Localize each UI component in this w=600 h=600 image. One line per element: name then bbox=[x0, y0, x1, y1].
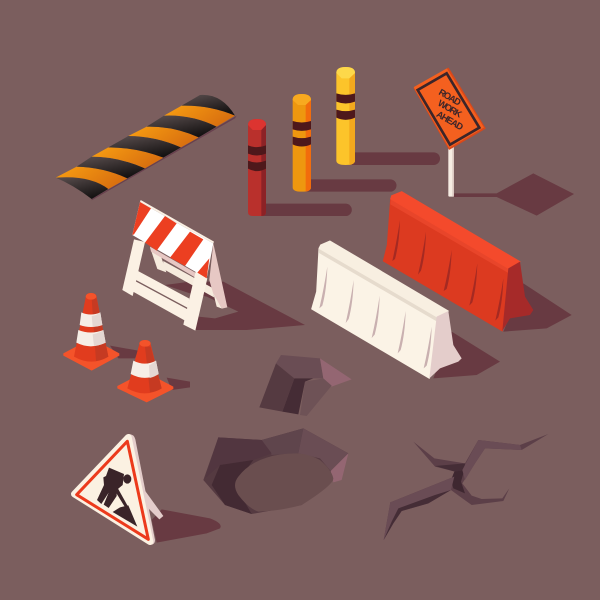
sawhorse barricade and cones bbox=[63, 200, 305, 402]
sign board: ROAD bbox=[437, 87, 463, 108]
speed bump bbox=[56, 95, 237, 200]
barricade shadow bbox=[165, 282, 305, 330]
bollard: yellow bbox=[336, 67, 355, 165]
shadows of bollards bbox=[262, 152, 440, 216]
large pothole bbox=[203, 428, 348, 514]
sign shadow bbox=[152, 509, 221, 543]
sign face bbox=[74, 437, 150, 542]
sign pole bbox=[448, 147, 454, 197]
barricade front legs bbox=[122, 239, 207, 331]
sign board: WORK bbox=[436, 98, 464, 120]
sign stand bbox=[143, 488, 163, 519]
sign board: AHEAD bbox=[435, 109, 465, 133]
small pothole bbox=[259, 355, 352, 416]
barrier shadows bbox=[503, 283, 572, 332]
sign thickness bbox=[128, 434, 155, 545]
red border bbox=[77, 441, 148, 539]
bollards and road sign bbox=[248, 67, 574, 216]
sign board bbox=[414, 68, 485, 149]
bollard: orange bbox=[293, 94, 311, 192]
sign shadow bbox=[453, 173, 574, 216]
barricade back legs and plank bbox=[150, 243, 227, 309]
traffic cone: large bbox=[63, 293, 119, 371]
concrete barriers bbox=[312, 192, 572, 378]
barricade striped board bbox=[132, 200, 214, 278]
cone shadows bbox=[110, 346, 138, 358]
traffic cone: small bbox=[117, 340, 173, 402]
barrier: white bbox=[312, 241, 462, 378]
bollard: red bbox=[248, 119, 266, 216]
men at work warning sign bbox=[74, 434, 221, 545]
road crack bbox=[384, 434, 548, 540]
barrier: red bbox=[383, 192, 533, 331]
worker figure bbox=[97, 468, 137, 527]
